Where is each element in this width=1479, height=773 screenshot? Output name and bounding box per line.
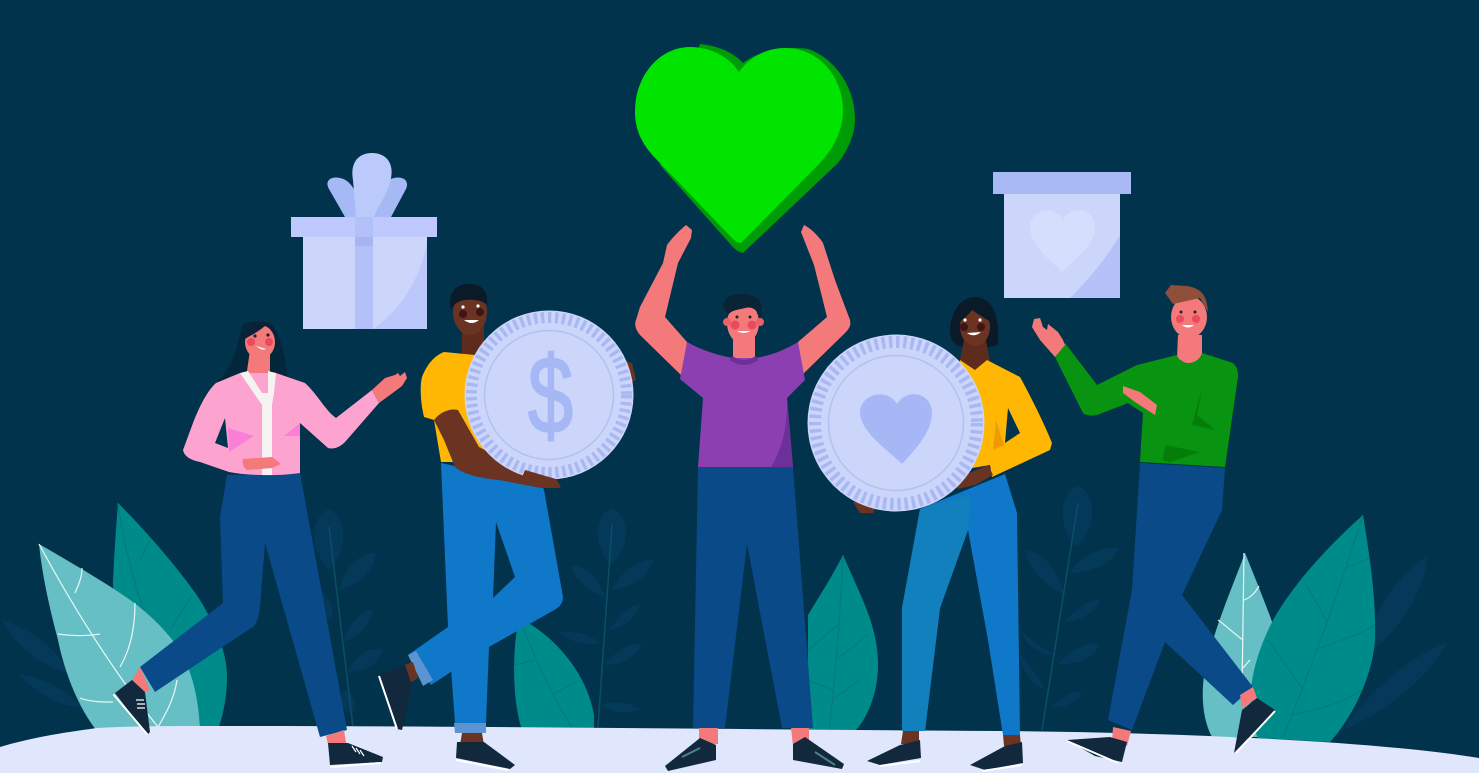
person: man in green [1032,285,1275,763]
collar and placket [240,371,276,475]
arm gap [1005,408,1020,443]
heart face [635,47,843,243]
hair [950,297,998,348]
ankles [699,728,809,746]
ankles [405,662,484,745]
hair [1165,285,1208,312]
plant: left sprig [314,509,382,727]
t-shirt [421,352,495,462]
face [247,333,273,350]
ankles [1112,687,1257,746]
head [453,289,487,335]
fringe [959,304,991,322]
far hand [622,360,636,384]
leaf: right teal [1250,515,1375,742]
plant: far left leaves [2,620,82,708]
jeans [902,474,1020,735]
t-shirt [680,342,805,467]
shoes [115,680,383,765]
head [1171,296,1207,338]
heart on box [1030,210,1095,272]
left hand [243,457,281,470]
leaf: right light teal [1203,553,1275,737]
ribbon [355,217,373,329]
sweater [955,360,1052,477]
blouse shade [228,423,300,452]
teal leaves [39,503,1375,742]
shoes [1067,698,1275,762]
neck [1177,335,1202,366]
trousers [1108,463,1253,730]
face [1176,310,1200,328]
leaf: center-left teal [514,618,594,730]
cuffs [408,651,486,733]
head [727,302,759,344]
plant: right sprig [1020,486,1119,730]
person: man with dollar coin [379,284,636,770]
shoes [379,665,515,769]
shoes [665,737,844,771]
plant: far right leaves [1343,557,1447,730]
ankles [132,667,346,744]
head [960,308,990,346]
neck [733,335,755,360]
dark background plants [2,486,1447,730]
far hand [853,502,878,513]
person: man in purple with raised arms [635,225,850,771]
face [960,318,985,335]
box body [303,237,427,329]
neck [960,335,990,378]
sweater shade [993,420,1004,450]
leaf: left light teal [39,544,200,731]
raised hand [1032,318,1065,357]
standing leg [441,463,544,723]
face [730,316,756,333]
leaf: center teal [808,555,878,731]
person: woman in pink [114,321,407,767]
trousers [693,467,813,728]
sweater [1055,343,1238,467]
right hand [372,372,407,403]
trousers [140,473,347,737]
shoes [867,740,1023,770]
hair front [243,321,276,340]
fingers over coin [520,470,561,488]
jean left shade [902,495,970,731]
hand [955,465,993,489]
neck [462,325,484,358]
resting hand [1123,386,1157,415]
hair [723,294,762,318]
ground [0,726,1479,773]
bent leg [408,470,563,685]
t-shirt shade [771,398,793,467]
box shade [1070,235,1120,298]
person: woman with heart coin [808,297,1052,771]
leg gap [493,522,515,598]
box shade [373,243,427,329]
ribbon knot shade [355,237,373,246]
heart coin [808,334,984,512]
blouse [183,373,379,475]
collar [731,358,757,362]
plant: middle sprig [560,508,653,727]
gift box with bow [291,153,437,329]
head [245,325,275,359]
neck [246,350,270,400]
leaf: left teal [113,503,227,730]
arm [434,409,560,488]
coin heart [860,394,932,464]
gift box with heart [993,172,1131,298]
hair back [217,321,288,382]
box lid [993,172,1131,194]
ankles [901,731,1021,746]
box body [1004,194,1120,298]
big green heart [635,44,855,253]
face [459,304,484,323]
arms [635,225,692,377]
dollar sign: $ [528,333,573,457]
bow [327,153,407,217]
heart shadow [660,44,855,253]
sweater folds [1163,385,1215,462]
dollar coin [464,310,634,480]
arm gap [215,418,228,448]
hair [450,284,487,310]
box lid [291,217,437,237]
